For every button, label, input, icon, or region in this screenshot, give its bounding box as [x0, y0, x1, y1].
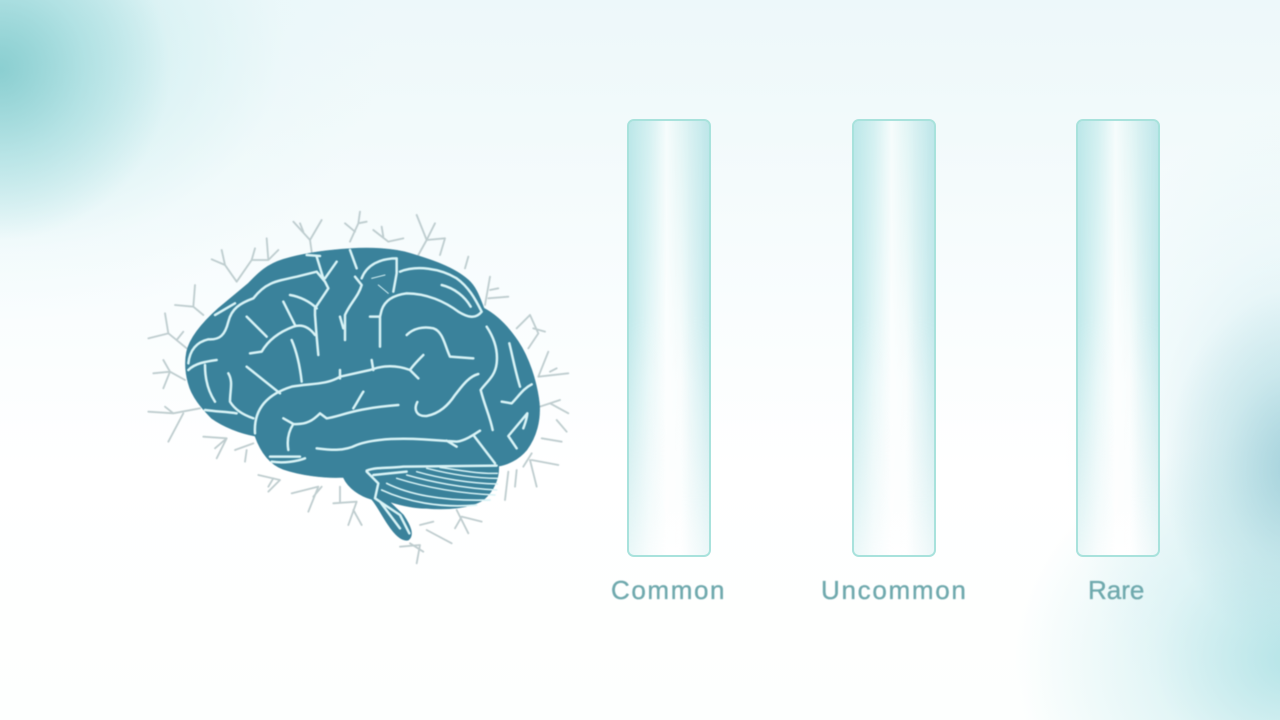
label: Common: Common	[611, 575, 726, 605]
column: Common	[627, 119, 711, 557]
neuron branches around the brain	[148, 212, 568, 563]
column: Uncommon	[852, 119, 936, 557]
brain fold lines	[188, 250, 532, 533]
label: Rare: Rare	[1088, 575, 1144, 605]
column: Rare	[1076, 119, 1160, 557]
brain silhouette	[186, 248, 540, 540]
label: Uncommon: Uncommon	[821, 575, 968, 605]
